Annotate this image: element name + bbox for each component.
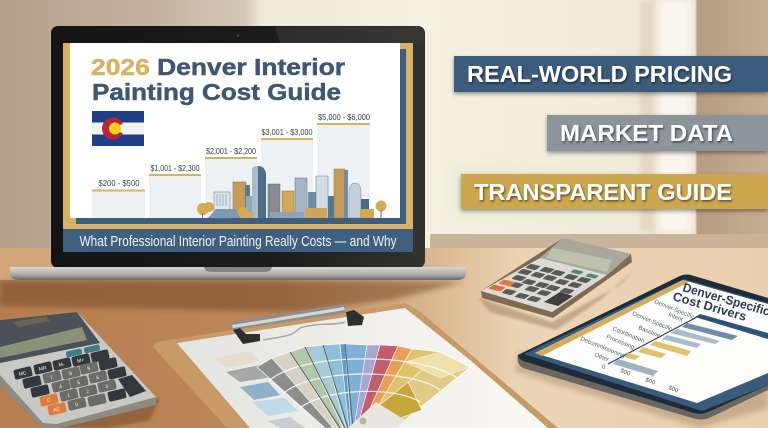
tablet chart: $00 [619, 368, 631, 378]
tablet chart: Other [593, 352, 609, 363]
tablet chart: Denver-Specific [631, 311, 673, 333]
tablet chart: Coordination [611, 326, 645, 345]
slide subtitle banner [63, 229, 413, 252]
trees [197, 200, 386, 218]
tag: market data [547, 115, 768, 151]
tag: real-world pricing [454, 56, 768, 92]
key labels: 7 [50, 375, 54, 381]
key labels: 5 [77, 380, 81, 386]
key labels [18, 357, 109, 414]
tablet chart: $00 [667, 385, 679, 395]
key labels: AC [53, 406, 61, 414]
price bar chart: $2,001 - $2,200 [206, 147, 256, 156]
key labels: C [46, 398, 52, 404]
tablet chart: Denver-Specific [653, 299, 695, 321]
key labels: M- [58, 361, 66, 369]
icon: Colorado flag [92, 111, 144, 146]
right calculator [478, 238, 634, 330]
left calculator [0, 312, 160, 428]
fan pivot [348, 402, 405, 428]
laptop [10, 26, 466, 280]
slide title [91, 54, 345, 105]
key labels: 3 [105, 384, 109, 390]
key labels: MR [38, 365, 48, 373]
tag: transparent guide: TRANSPARENT GUIDE [474, 179, 732, 205]
tag: market data: MARKET DATA [560, 120, 733, 146]
price bar chart [92, 113, 371, 218]
blurred window background [0, 0, 768, 252]
tag: real-world pricing: REAL-WORLD PRICING [467, 61, 732, 87]
keypad [13, 349, 146, 411]
slide title: Painting Cost Guide [92, 79, 341, 105]
key labels: 1 [67, 393, 71, 399]
key labels: M+ [77, 357, 85, 365]
price bar chart: $5,000 - $6,000 [318, 113, 371, 122]
tablet chart: $00 [644, 377, 656, 387]
tablet chart: Intent [667, 312, 684, 324]
slide subtitle banner: What Professional Interior Painting Really Costs — and Why [80, 234, 397, 250]
key labels: 8 [69, 371, 73, 377]
tablet screen [524, 279, 768, 411]
key labels: 2 [86, 389, 90, 395]
Denver skyline [197, 166, 386, 218]
key labels: 0 [75, 402, 79, 408]
tablet [515, 274, 768, 428]
sample swatches [214, 351, 305, 428]
laptop screen slide [63, 43, 413, 252]
laptop base [10, 267, 466, 280]
price bar chart: $1,001 - $2,300 [150, 164, 200, 173]
tablet chart: 0 [602, 365, 606, 371]
tablet chart: Decommissioning [579, 336, 625, 360]
wooden desk [0, 248, 768, 428]
clipboard [153, 303, 558, 428]
paint swatch fan [257, 344, 470, 428]
tablet heading: Cost Drivers [671, 289, 748, 324]
tablet chart [579, 299, 768, 395]
key labels: 6 [96, 375, 100, 381]
laptop lid [51, 26, 425, 268]
slide title: 2026 Denver Interior [91, 54, 345, 80]
key labels: MC [18, 370, 28, 378]
tablet chart: Baseline [637, 325, 661, 340]
price bar chart: $200 - $500 [98, 179, 140, 188]
tablet chart: Processing [605, 334, 635, 351]
key labels: 9 [87, 366, 91, 372]
keypad [501, 264, 592, 306]
price bar chart: $3,001 - $3,000 [262, 128, 313, 137]
clip [231, 304, 364, 344]
key labels: 4 [59, 384, 63, 390]
tag: transparent guide [461, 174, 768, 209]
